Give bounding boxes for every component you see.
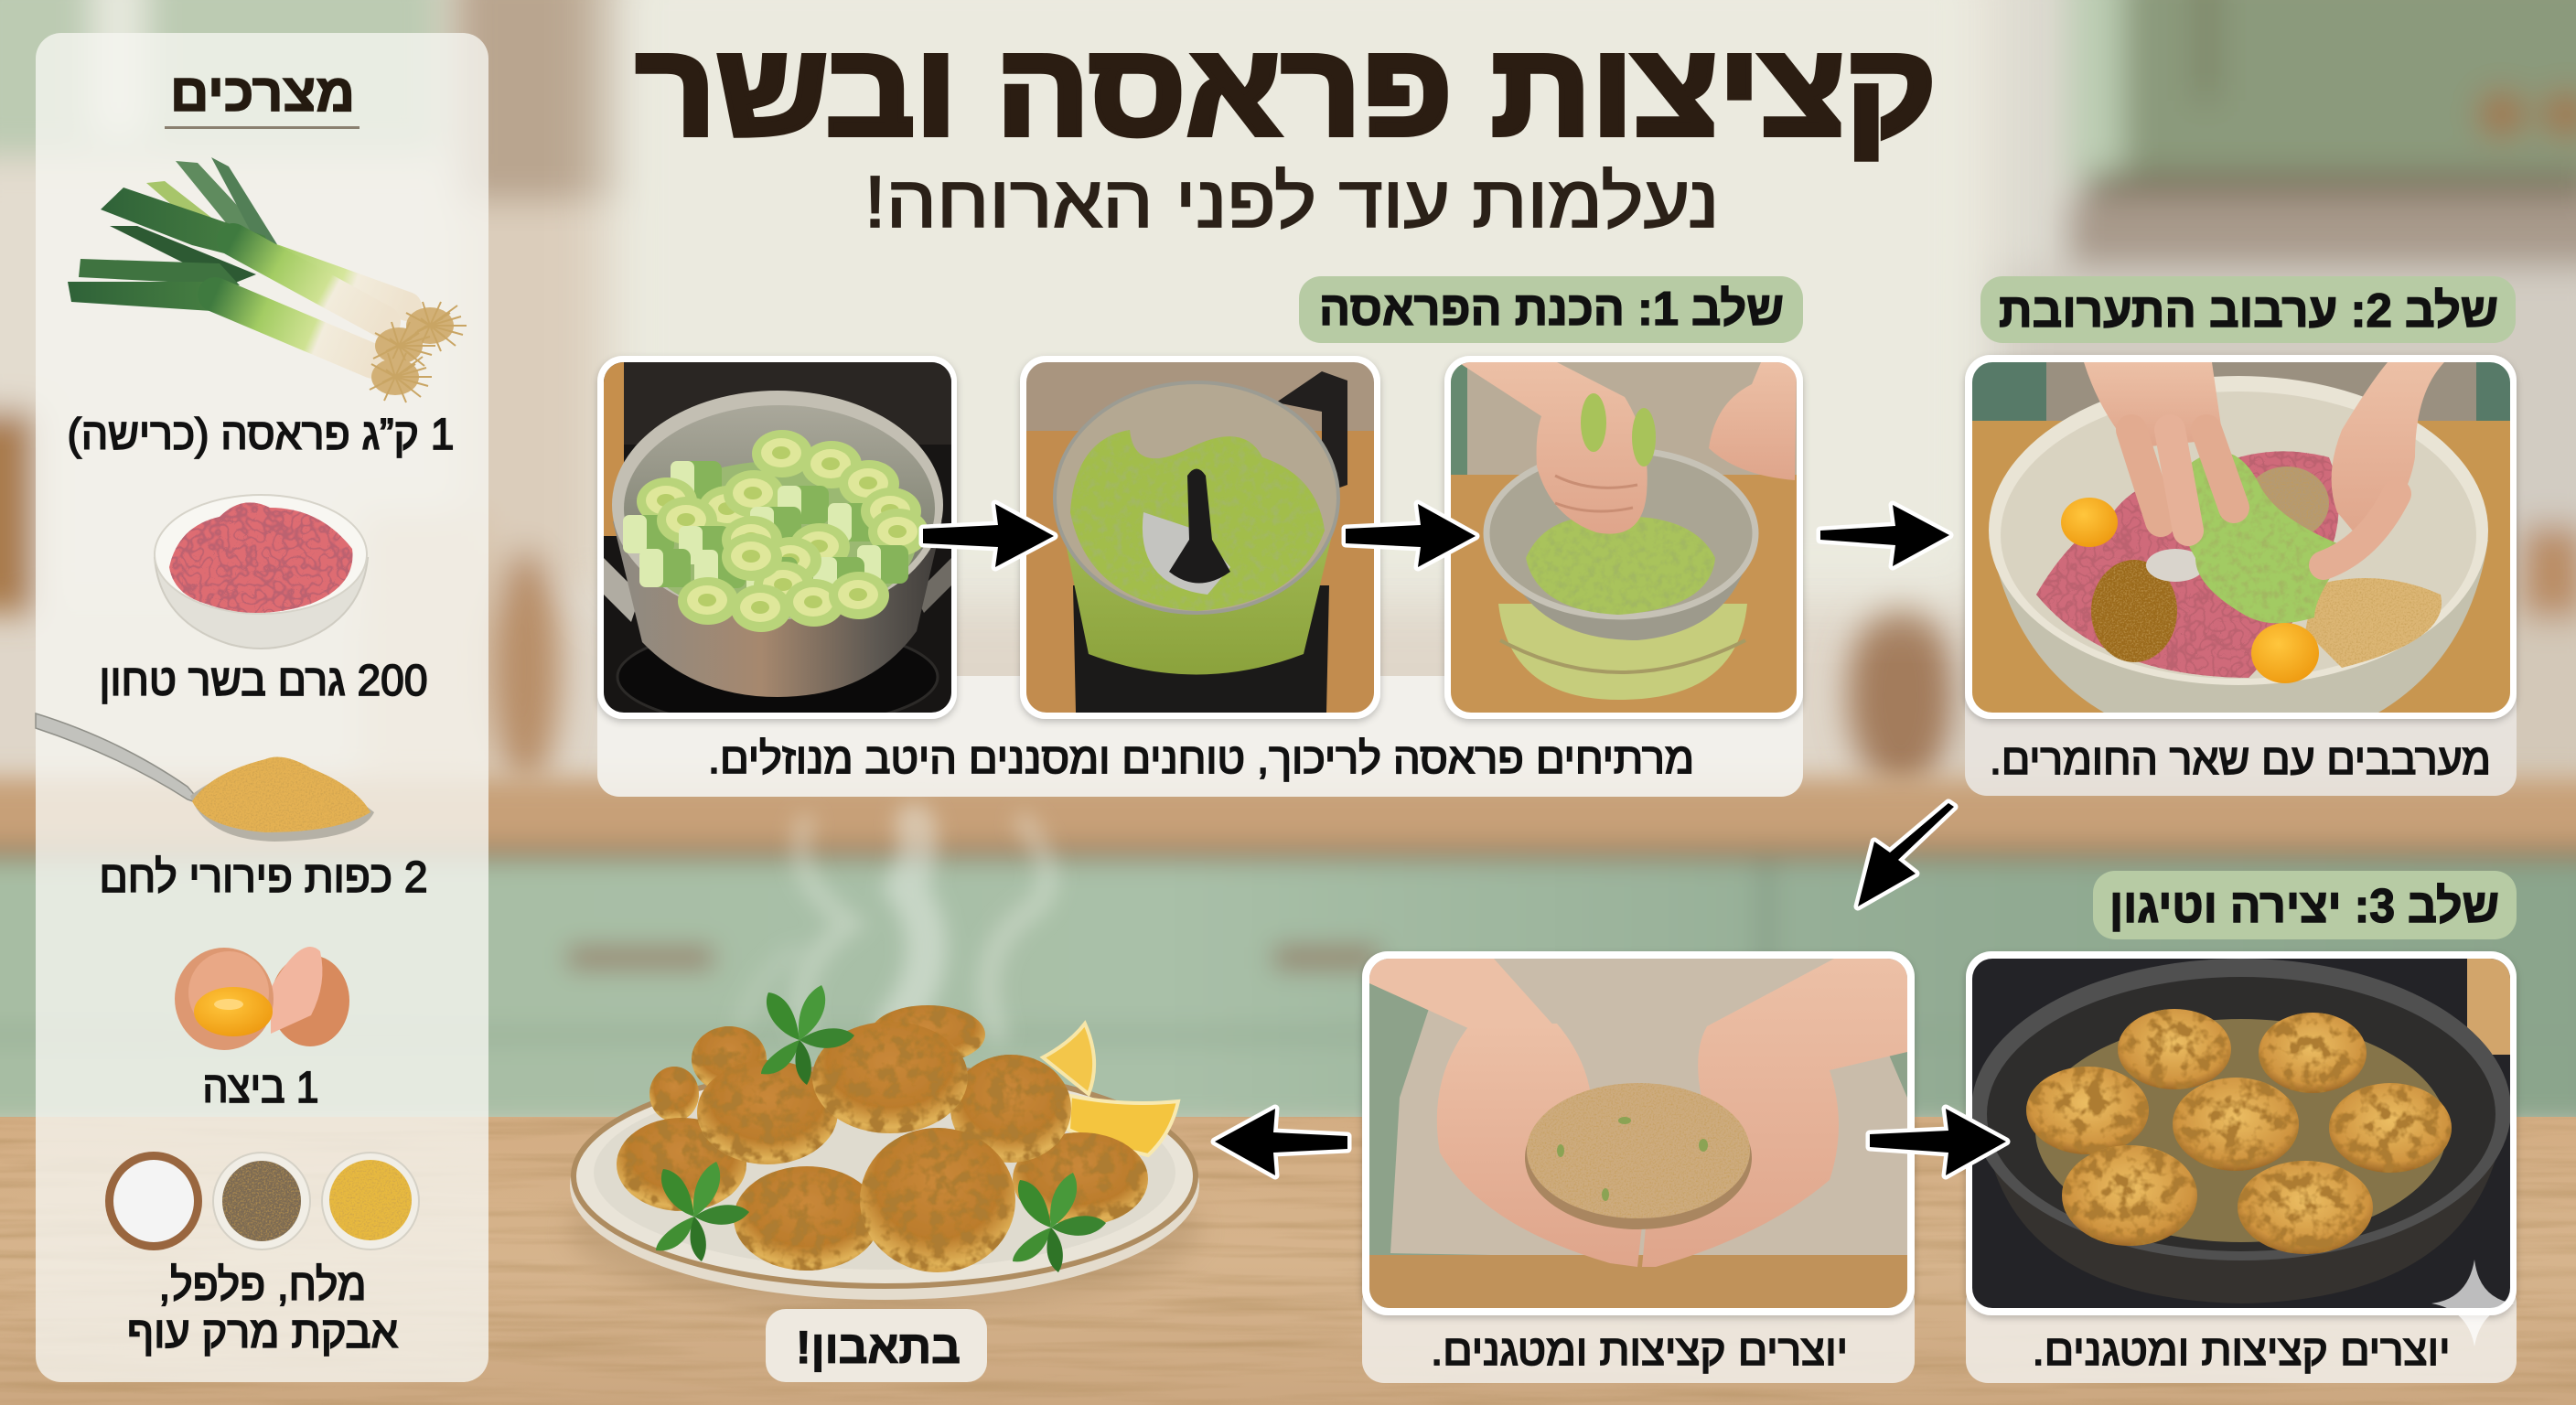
photo: shaping patty in hands (1362, 951, 1915, 1315)
ingredients heading: מצרכים (170, 63, 355, 123)
icon: leeks (68, 157, 467, 402)
text: seasonings (127, 1261, 398, 1357)
arrow: shaping to plate (1215, 1109, 1347, 1175)
closing label (766, 1309, 987, 1382)
caption text: step 2: מערבבים עם שאר החומרים. (1990, 735, 2491, 783)
caption panel: frying (1966, 1281, 2517, 1383)
closing label: בתאבון! (796, 1322, 961, 1373)
sparkle (2431, 1260, 2515, 1346)
caption text: shaping: יוצרים קציצות ומטגנים. (1431, 1325, 1848, 1374)
photo: mixing bowl (1965, 355, 2517, 719)
caption panel: shaping (1362, 1281, 1915, 1383)
caption text: step 1: מרתיחים פראסה לריכוך, טוחנים ומסננים היטב מנוזלים. (708, 734, 1694, 782)
step 2 label: שלב 2: ערבוב התערובת (1999, 284, 2498, 338)
icon: bowl of ground meat (155, 495, 368, 649)
parsley sprigs (656, 985, 1106, 1272)
caption text: frying: יוצרים קציצות ומטגנים. (2033, 1325, 2450, 1374)
caption panel: step 2 (1965, 676, 2517, 796)
arrow: processor to strainer (1346, 504, 1476, 567)
panel: ingredients (36, 33, 488, 1382)
text: egg amount: 1 ביצה (203, 1064, 318, 1112)
arrow: step 2 to step 3 (1858, 803, 1954, 906)
text: meat amount: 200 גרם בשר טחון (99, 657, 428, 705)
arrow: pot to processor (923, 504, 1054, 567)
icon: bowls of salt, pepper and soup powder (105, 1152, 419, 1250)
arrow: step 1 to step 2 (1820, 505, 1949, 566)
text: seasonings: מלח, פלפל, (159, 1261, 366, 1310)
title: קציצות פראסה ובשר (636, 17, 1937, 163)
text: leek amount: 1 ק”ג פראסה (כרישה) (68, 411, 455, 459)
step 3 label: שלב 3: יצירה וטיגון (2109, 880, 2499, 933)
arrow: frying to shaping (1870, 1109, 2006, 1175)
photo: food processor with leek puree (1020, 356, 1380, 719)
icon: cracked egg (175, 947, 349, 1050)
lemon wedges (1043, 1024, 1178, 1155)
step 1 label: שלב 1: הכנת הפראסה (1319, 283, 1784, 336)
photo: frying patties in pan (1966, 951, 2517, 1315)
photo: straining leek puree (1444, 356, 1803, 719)
steam (741, 823, 1047, 1034)
text: breadcrumbs amount: 2 כפות פירורי לחם (99, 853, 428, 902)
subtitle: נעלמות עוד לפני הארוחה! (864, 161, 1720, 242)
plate of patties (569, 985, 1200, 1311)
icon: spoon with breadcrumbs (36, 713, 374, 842)
text: seasonings: אבקת מרק עוף (127, 1309, 398, 1357)
photo: pot of leeks (597, 356, 957, 727)
caption panel: step 1 (597, 676, 1803, 797)
